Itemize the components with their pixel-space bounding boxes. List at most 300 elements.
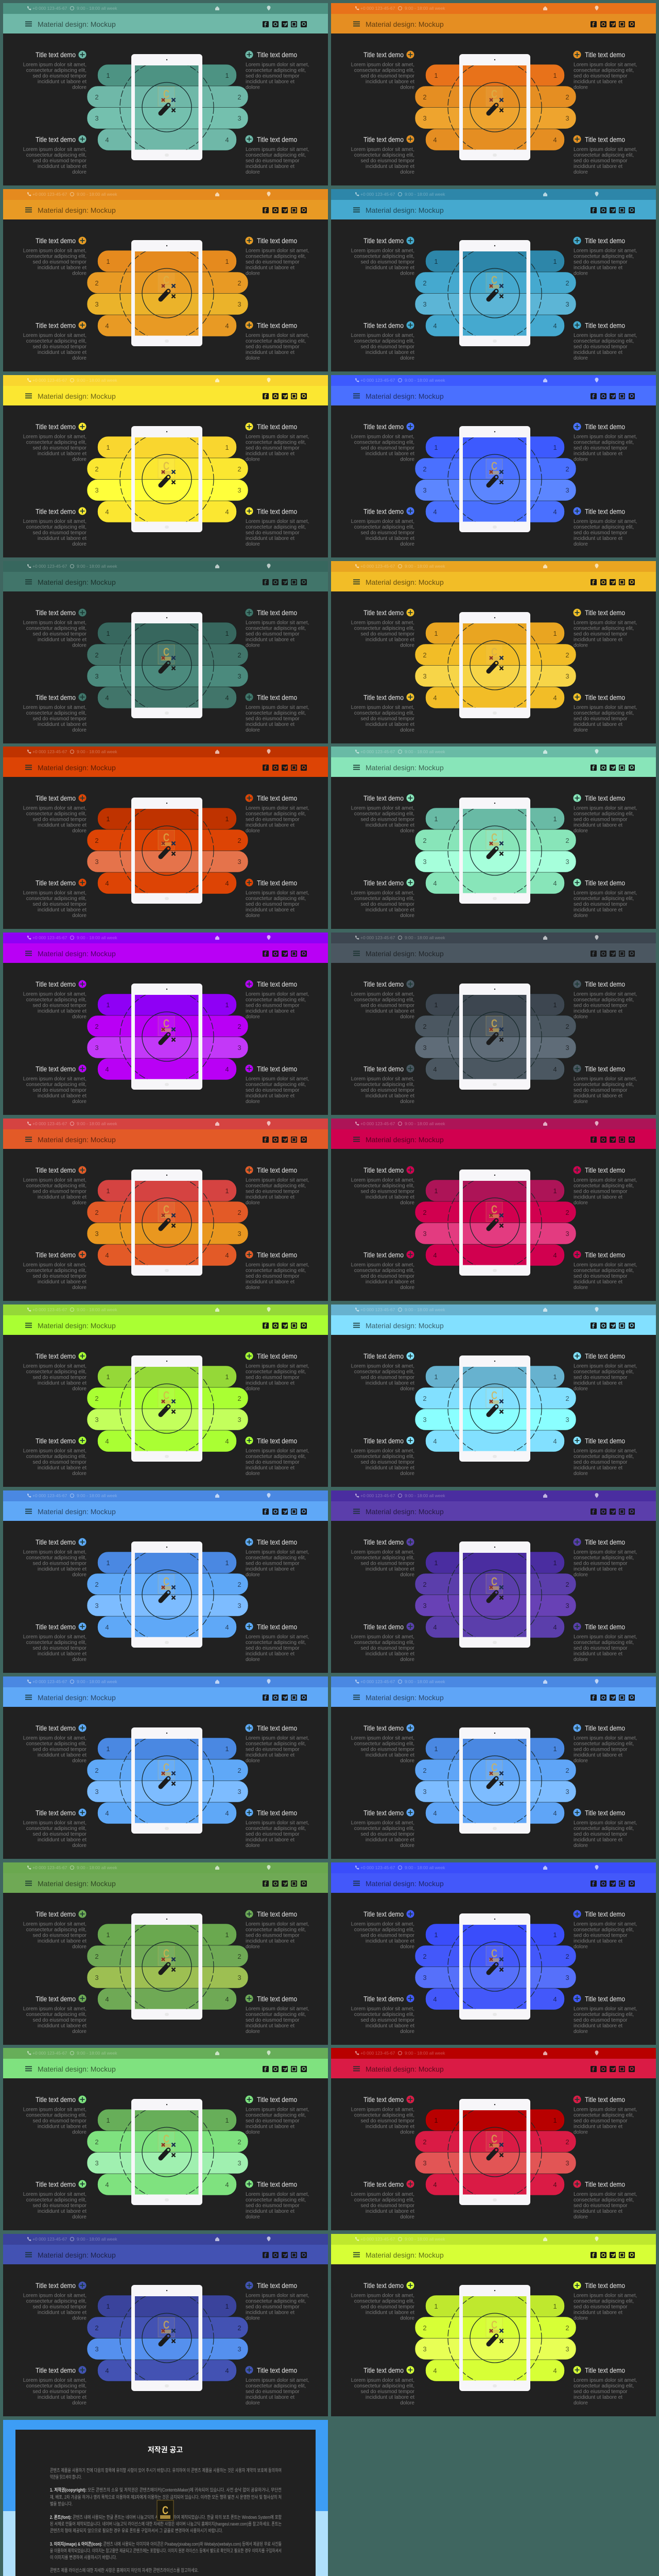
text block: bottom left: Lorem ipsum dolor sit amet, (23, 147, 86, 152)
bar numbers: 4 (225, 2367, 229, 2375)
text block: bottom left: dolore (72, 1099, 86, 1105)
bar numbers: 4 (433, 136, 437, 144)
header bands and icons (331, 375, 656, 557)
text block: bottom right (246, 1064, 309, 1105)
header bands and icons (3, 1490, 328, 1673)
contact bar text: +0 000 123-45-67 (32, 1121, 67, 1126)
text block: top left: Title text demo (363, 980, 404, 988)
bar numbers: 4 (433, 879, 437, 887)
text block: bottom left: Lorem ipsum dolor sit amet, (23, 2378, 86, 2383)
text block: top left: sed do eiusmod tempor (360, 2119, 415, 2124)
text block: bottom right (574, 2180, 637, 2220)
text block: bottom right: Title text demo (257, 2366, 297, 2374)
bar numbers: 4 (225, 1065, 229, 1073)
contact bar text (360, 378, 445, 383)
text block: bottom left: Title text demo (36, 1251, 76, 1259)
text block: top right: Lorem ipsum dolor sit amet, (574, 2293, 637, 2299)
contact bar text (32, 1679, 117, 1684)
bar numbers (95, 72, 241, 144)
text block: bottom left (23, 693, 87, 733)
text block: bottom right: sed do eiusmod tempor (574, 902, 628, 907)
text block: bottom right: incididunt ut labore et (574, 350, 622, 355)
text block: bottom left: dolore (72, 541, 86, 547)
text block: bottom left: Lorem ipsum dolor sit amet, (23, 1262, 86, 1268)
text block: top left: consectetur adipiscing elit, (26, 997, 86, 1003)
bar numbers: 2 (95, 1023, 99, 1030)
bar numbers: 2 (423, 2138, 427, 2146)
text block: bottom left (351, 879, 415, 919)
text block: top right: consectetur adipiscing elit, (246, 253, 306, 260)
header bands and icons (3, 3, 328, 185)
text block: top left: Lorem ipsum dolor sit amet, (351, 62, 414, 68)
text block: top left: Lorem ipsum dolor sit amet, (351, 248, 414, 253)
text block: bottom right: Lorem ipsum dolor sit amet, (574, 2378, 637, 2383)
text block: top left: incididunt ut labore et (38, 265, 86, 271)
text block: bottom right: consectetur adipiscing elit, (574, 524, 634, 530)
text block: bottom right: Title text demo (585, 2366, 625, 2374)
text block: top left: dolore (72, 1944, 86, 1950)
bar numbers: 1 (553, 72, 557, 79)
text block: top left: incididunt ut labore et (366, 265, 414, 271)
text block: top right: incididunt ut labore et (574, 1381, 622, 1386)
text block: bottom right: Lorem ipsum dolor sit amet, (246, 1448, 309, 1454)
text block: bottom left: consectetur adipiscing elit, (354, 1268, 414, 1274)
text block: top left: sed do eiusmod tempor (360, 260, 415, 265)
text block: top right: incididunt ut labore et (574, 451, 622, 456)
bar numbers: 2 (95, 93, 99, 101)
bar numbers: 3 (237, 2345, 241, 2353)
text block: top right: incididunt ut labore et (574, 1566, 622, 1572)
text block: top left: sed do eiusmod tempor (360, 1375, 415, 1381)
text block: bottom right: incididunt ut labore et (246, 1093, 294, 1099)
bar numbers: 2 (423, 1581, 427, 1588)
text block: bottom right: Lorem ipsum dolor sit amet, (574, 1448, 637, 1454)
header bands and icons (3, 933, 328, 1115)
text block: bottom left: Title text demo (36, 1623, 76, 1631)
text block: top right: dolore (574, 456, 588, 463)
text block: bottom left: incididunt ut labore et (366, 1837, 414, 1843)
panel: slide 3 amber orange (3, 189, 328, 371)
text block: bottom left: Title text demo (36, 1436, 76, 1445)
text block: top right: Lorem ipsum dolor sit amet, (574, 62, 637, 68)
text block: bottom left: consectetur adipiscing elit, (26, 1826, 86, 1832)
text block: bottom left: dolore (400, 1843, 414, 1849)
text block: bottom right: incididunt ut labore et (574, 1651, 622, 1657)
text block: top right: Lorem ipsum dolor sit amet, (574, 620, 637, 625)
bar numbers: 4 (225, 879, 229, 887)
text block: bottom left: dolore (72, 355, 86, 361)
panel: copyright notice (3, 2420, 328, 2576)
text block: top left: Lorem ipsum dolor sit amet, (351, 1922, 414, 1927)
text block: top right: dolore (246, 1014, 260, 1020)
text block: bottom right (574, 879, 637, 919)
text block: top left: consectetur adipiscing elit, (354, 68, 414, 73)
text block: top right (574, 2095, 637, 2135)
bar numbers (423, 1745, 569, 1817)
text block: bottom left: dolore (400, 355, 414, 361)
text block: bottom left: incididunt ut labore et (38, 536, 86, 541)
bar numbers: 4 (553, 1809, 557, 1817)
text block: bottom left: consectetur adipiscing elit, (26, 1454, 86, 1460)
text block: bottom right: dolore (246, 1099, 260, 1105)
text block: bottom left: dolore (72, 2214, 86, 2220)
text block: bottom left: Title text demo (363, 693, 404, 702)
bar numbers: 4 (553, 136, 557, 144)
text block: top left: dolore (400, 84, 414, 91)
text block: top right: Lorem ipsum dolor sit amet, (246, 1922, 309, 1927)
text block: top right: dolore (574, 1386, 588, 1392)
watermark logo badge (157, 2500, 174, 2520)
text block: bottom right: sed do eiusmod tempor (246, 2018, 300, 2023)
bar numbers: 2 (95, 1395, 99, 1402)
text block: top right: Lorem ipsum dolor sit amet, (574, 1922, 637, 1927)
bar numbers: 3 (423, 300, 427, 308)
text block: top right: Title text demo (585, 2095, 625, 2104)
text block: bottom right (574, 1995, 637, 2035)
contact bar text (360, 192, 445, 197)
text block: bottom right: dolore (574, 913, 588, 919)
text block: top left: consectetur adipiscing elit, (354, 2299, 414, 2304)
text block: top right: dolore (574, 84, 588, 91)
text block: top right (246, 1166, 309, 1206)
text block: top left: consectetur adipiscing elit, (26, 1741, 86, 1747)
contact bar text: 9:00 - 18:00 all week (77, 2236, 117, 2242)
text block: bottom right: incididunt ut labore et (574, 1093, 622, 1099)
text block: top left: sed do eiusmod tempor (32, 445, 87, 451)
text block: bottom left (23, 1995, 87, 2035)
text block: top right: incididunt ut labore et (246, 822, 294, 828)
text block: top left: sed do eiusmod tempor (360, 1747, 415, 1753)
watermark logo: C (491, 1203, 497, 1216)
contact bar text: 9:00 - 18:00 all week (405, 935, 445, 940)
text block: bottom left: incididunt ut labore et (366, 536, 414, 541)
contact bar text: 9:00 - 18:00 all week (405, 192, 445, 197)
text block: bottom right: dolore (574, 1285, 588, 1291)
panel: slide 2 orange (331, 3, 656, 185)
text block: top right: Title text demo (585, 236, 625, 245)
text block: bottom right: consectetur adipiscing elit, (574, 1826, 634, 1832)
header bands and icons (331, 1118, 656, 1301)
text block: bottom left: sed do eiusmod tempor (360, 530, 415, 536)
text block: bottom left (351, 1623, 415, 1663)
text block: bottom right: sed do eiusmod tempor (246, 158, 300, 164)
bar numbers: 3 (237, 1230, 241, 1238)
tablet diagram (78, 50, 253, 160)
header bands and icons (331, 1490, 656, 1673)
header bands and icons (3, 2234, 328, 2416)
panel: slide 10 mint (331, 747, 656, 929)
text block: top left: sed do eiusmod tempor (32, 1189, 87, 1194)
header bands and icons (3, 1304, 328, 1487)
panel: slide 18 violet (331, 1490, 656, 1673)
bar numbers: 3 (95, 1602, 99, 1609)
bar numbers: 3 (237, 672, 241, 680)
text block: bottom left: Lorem ipsum dolor sit amet, (351, 890, 414, 896)
contact bar text: +0 000 123-45-67 (32, 1307, 67, 1312)
text block: top left: Lorem ipsum dolor sit amet, (351, 434, 414, 440)
heading: Material design: Mockup (38, 392, 116, 400)
text block: bottom left: sed do eiusmod tempor (32, 2203, 87, 2209)
text block: bottom left: incididunt ut labore et (38, 1279, 86, 1285)
text block: bottom right: Lorem ipsum dolor sit amet, (246, 2006, 309, 2012)
text block: bottom left: consectetur adipiscing elit, (26, 338, 86, 344)
text block: bottom right: incididunt ut labore et (246, 536, 294, 541)
text block: top left: sed do eiusmod tempor (32, 1561, 87, 1566)
text block: top left: dolore (400, 1014, 414, 1020)
text block: bottom left: sed do eiusmod tempor (32, 344, 87, 350)
heading: Material design: Mockup (38, 1136, 116, 1144)
text block: top right: dolore (246, 456, 260, 463)
text block: bottom right: dolore (246, 170, 260, 175)
panel: slide 11 purple (3, 933, 328, 1115)
text block: bottom right: Lorem ipsum dolor sit amet, (246, 890, 309, 896)
text block: top right: Lorem ipsum dolor sit amet, (246, 62, 309, 68)
text block: top right: incididunt ut labore et (246, 1753, 294, 1758)
text block: top right: Title text demo (585, 608, 625, 617)
text block: top left: Lorem ipsum dolor sit amet, (23, 806, 86, 811)
text block: bottom left: incididunt ut labore et (366, 1093, 414, 1099)
panel: slide 5 yellow (3, 375, 328, 557)
text block: bottom right (574, 693, 637, 733)
text block: bottom right: consectetur adipiscing elit, (246, 152, 306, 158)
text block: top right: consectetur adipiscing elit, (246, 1741, 306, 1747)
bar numbers: 3 (565, 1974, 569, 1981)
text block: bottom left: Title text demo (363, 321, 404, 330)
header bands and icons (3, 747, 328, 929)
text block: top right: Lorem ipsum dolor sit amet, (246, 1178, 309, 1183)
text block: bottom left: sed do eiusmod tempor (32, 716, 87, 722)
header bands and icons (331, 747, 656, 929)
text block: bottom left (351, 2366, 415, 2406)
text block: bottom right: Lorem ipsum dolor sit amet, (246, 1634, 309, 1640)
bar numbers: 4 (433, 2367, 437, 2375)
text block: bottom right: sed do eiusmod tempor (246, 2389, 300, 2395)
header bands and icons (3, 561, 328, 743)
contact bar text: 9:00 - 18:00 all week (77, 1121, 117, 1126)
text block: bottom right: sed do eiusmod tempor (246, 344, 300, 350)
text block: top right: consectetur adipiscing elit, (574, 1555, 634, 1561)
text block: top left: sed do eiusmod tempor (360, 445, 415, 451)
bar numbers: 1 (553, 1001, 557, 1009)
text block: bottom left (23, 1436, 87, 1477)
text block: top right: incididunt ut labore et (574, 1753, 622, 1758)
bar numbers: 3 (237, 300, 241, 308)
text block: bottom right: Lorem ipsum dolor sit amet, (246, 2378, 309, 2383)
text block: bottom right: incididunt ut labore et (574, 2209, 622, 2214)
bar numbers: 2 (237, 465, 241, 473)
bar numbers (423, 2116, 569, 2189)
text block: bottom left: Lorem ipsum dolor sit amet, (351, 2192, 414, 2197)
bar numbers: 4 (105, 1995, 109, 2003)
bar numbers: 3 (95, 300, 99, 308)
text block: top right (246, 2281, 309, 2321)
text block: top right: Title text demo (585, 1538, 625, 1546)
text block: bottom right: sed do eiusmod tempor (574, 1460, 628, 1465)
bar numbers: 3 (565, 1788, 569, 1795)
text block: bottom left: consectetur adipiscing elit, (26, 896, 86, 902)
text block: top left: Lorem ipsum dolor sit amet, (351, 991, 414, 997)
text block: bottom right: dolore (574, 1657, 588, 1663)
contact bar text: +0 000 123-45-67 (32, 6, 67, 11)
text block: bottom left: dolore (72, 913, 86, 919)
contact bar text: +0 000 123-45-67 (32, 192, 67, 197)
bar numbers: 3 (95, 1974, 99, 1981)
text block: bottom right: Title text demo (257, 2180, 297, 2189)
text block: top left: incididunt ut labore et (38, 1938, 86, 1944)
text block: top left (23, 1538, 87, 1578)
text block: top right: consectetur adipiscing elit, (574, 2112, 634, 2119)
bar numbers: 4 (105, 508, 109, 516)
text block: top right: Title text demo (257, 1538, 297, 1546)
text block: bottom left: dolore (400, 2029, 414, 2035)
text block: bottom right: sed do eiusmod tempor (574, 1274, 628, 1279)
bar numbers: 1 (225, 1373, 229, 1381)
watermark logo: C (491, 274, 497, 286)
text block: top left: dolore (72, 1200, 86, 1206)
text block: top right: consectetur adipiscing elit, (246, 440, 306, 445)
text block: top right: sed do eiusmod tempor (574, 445, 628, 451)
text block: top right: incididunt ut labore et (246, 1566, 294, 1572)
text block: bottom right: consectetur adipiscing elit, (246, 1268, 306, 1274)
bar numbers: 2 (423, 93, 427, 101)
panel: slide 17 light blue (3, 1490, 328, 1673)
bar numbers: 1 (553, 630, 557, 637)
text block: top left: Lorem ipsum dolor sit amet, (23, 1550, 86, 1555)
tablet diagram (78, 980, 253, 1090)
bar numbers: 4 (433, 1251, 437, 1259)
watermark logo: C (163, 1761, 169, 1774)
text block: top left: Title text demo (363, 1910, 404, 1918)
text block: bottom left: incididunt ut labore et (38, 2209, 86, 2214)
bar numbers (423, 1001, 569, 1073)
text block: bottom right: sed do eiusmod tempor (574, 1088, 628, 1093)
text block: top left: Lorem ipsum dolor sit amet, (23, 620, 86, 625)
text block: top right: sed do eiusmod tempor (246, 2119, 300, 2124)
text block: top left: consectetur adipiscing elit, (26, 811, 86, 817)
contact bar text: 9:00 - 18:00 all week (405, 6, 445, 11)
text block: top left: consectetur adipiscing elit, (354, 1369, 414, 1375)
text block: bottom right: consectetur adipiscing elit, (246, 710, 306, 716)
text block: bottom left: sed do eiusmod tempor (360, 1646, 415, 1651)
text block: top left: dolore (400, 643, 414, 648)
watermark logo: C (163, 88, 169, 100)
text block: bottom left: Lorem ipsum dolor sit amet, (351, 333, 414, 338)
text block: top right (574, 50, 637, 91)
text block: bottom right: incididunt ut labore et (246, 164, 294, 170)
contact bar text (32, 1307, 117, 1312)
text block: top left: Title text demo (363, 1538, 404, 1546)
watermark logo: C (491, 88, 497, 100)
text block: top left (23, 980, 87, 1020)
text block: bottom right: Title text demo (257, 1436, 297, 1445)
bar numbers: 2 (95, 2138, 99, 2146)
bar numbers: 4 (433, 694, 437, 702)
bar numbers: 1 (106, 444, 110, 451)
bar numbers: 1 (106, 2302, 110, 2310)
contact bar text (32, 935, 117, 940)
text block: top left: Title text demo (36, 2095, 76, 2104)
bar numbers: 3 (565, 2159, 569, 2167)
text block: bottom left (23, 879, 87, 919)
bar numbers: 4 (105, 2367, 109, 2375)
text block: bottom left: incididunt ut labore et (366, 722, 414, 727)
bar numbers: 3 (423, 2159, 427, 2167)
bar numbers: 3 (423, 1974, 427, 1981)
text block: bottom right: incididunt ut labore et (574, 907, 622, 913)
text block: top left: sed do eiusmod tempor (32, 1375, 87, 1381)
bar numbers: 1 (434, 444, 438, 451)
text block: bottom left (23, 321, 87, 361)
text block: top left: sed do eiusmod tempor (32, 817, 87, 822)
text block: bottom left: Lorem ipsum dolor sit amet, (351, 705, 414, 710)
tablet diagram (78, 2281, 253, 2391)
text block: bottom left: Title text demo (363, 1436, 404, 1445)
text block: bottom left: incididunt ut labore et (38, 907, 86, 913)
text block: bottom right: Title text demo (585, 2180, 625, 2189)
text block: bottom right (574, 2366, 637, 2406)
text block: top right: sed do eiusmod tempor (574, 2304, 628, 2310)
text block: top right: consectetur adipiscing elit, (246, 625, 306, 632)
text block: bottom left: dolore (72, 1843, 86, 1849)
text block: top left: Lorem ipsum dolor sit amet, (23, 991, 86, 997)
text block: bottom left: incididunt ut labore et (38, 1465, 86, 1471)
text block: top right: dolore (574, 1014, 588, 1020)
contact bar text: +0 000 123-45-67 (360, 1865, 395, 1870)
text block: bottom left: sed do eiusmod tempor (32, 2018, 87, 2023)
contact bar text (360, 1307, 445, 1312)
bar numbers: 2 (565, 2324, 569, 2332)
text block: top left: incididunt ut labore et (366, 1938, 414, 1944)
text block: top right: sed do eiusmod tempor (246, 445, 300, 451)
bar numbers: 3 (237, 858, 241, 866)
header bands and icons (331, 561, 656, 743)
text block: bottom right: dolore (246, 355, 260, 361)
text block: top right: Lorem ipsum dolor sit amet, (246, 2293, 309, 2299)
text block: top right: dolore (246, 271, 260, 276)
text block: top right: dolore (246, 643, 260, 648)
tablet diagram (78, 1538, 253, 1648)
panel: slide 7 dark teal (3, 561, 328, 743)
text block: bottom left: incididunt ut labore et (38, 1837, 86, 1843)
text block: bottom left: Title text demo (36, 2366, 76, 2374)
contact bar text: 9:00 - 18:00 all week (77, 1679, 117, 1684)
text block: bottom left (23, 2180, 87, 2220)
text block: top right: Title text demo (585, 1910, 625, 1918)
text block: top right: incididunt ut labore et (574, 637, 622, 643)
copyright body text: 2. 폰트(font): 콘텐츠 내에 사용되는 한글 폰트는 네이버 나눔고딕의 서체를 사용하여 제작되었습니다. 한글 외의 보조 폰트는 Windows System에 포함 (50, 2514, 282, 2520)
watermark logo: C (491, 1947, 497, 1960)
text block: bottom right: Title text demo (585, 507, 625, 515)
text block: bottom right: Lorem ipsum dolor sit amet, (574, 890, 637, 896)
copyright title: 저작권 공고 (148, 2446, 183, 2454)
tablet diagram (78, 2095, 253, 2205)
bar numbers: 4 (553, 1995, 557, 2003)
text block: top right (246, 1538, 309, 1578)
text block: bottom right: incididunt ut labore et (574, 1279, 622, 1285)
text block: bottom left: consectetur adipiscing elit, (26, 152, 86, 158)
contact bar text (32, 192, 117, 197)
text block: top left: Title text demo (36, 980, 76, 988)
bar numbers: 2 (423, 1023, 427, 1030)
text block: bottom right: incididunt ut labore et (246, 2209, 294, 2214)
text block: top right: sed do eiusmod tempor (246, 632, 300, 637)
bar numbers: 1 (225, 444, 229, 451)
text block: top left (351, 608, 415, 648)
bar numbers: 2 (237, 1395, 241, 1402)
bar numbers: 1 (225, 258, 229, 265)
text block: top left: consectetur adipiscing elit, (354, 253, 414, 260)
bar numbers: 2 (565, 279, 569, 287)
